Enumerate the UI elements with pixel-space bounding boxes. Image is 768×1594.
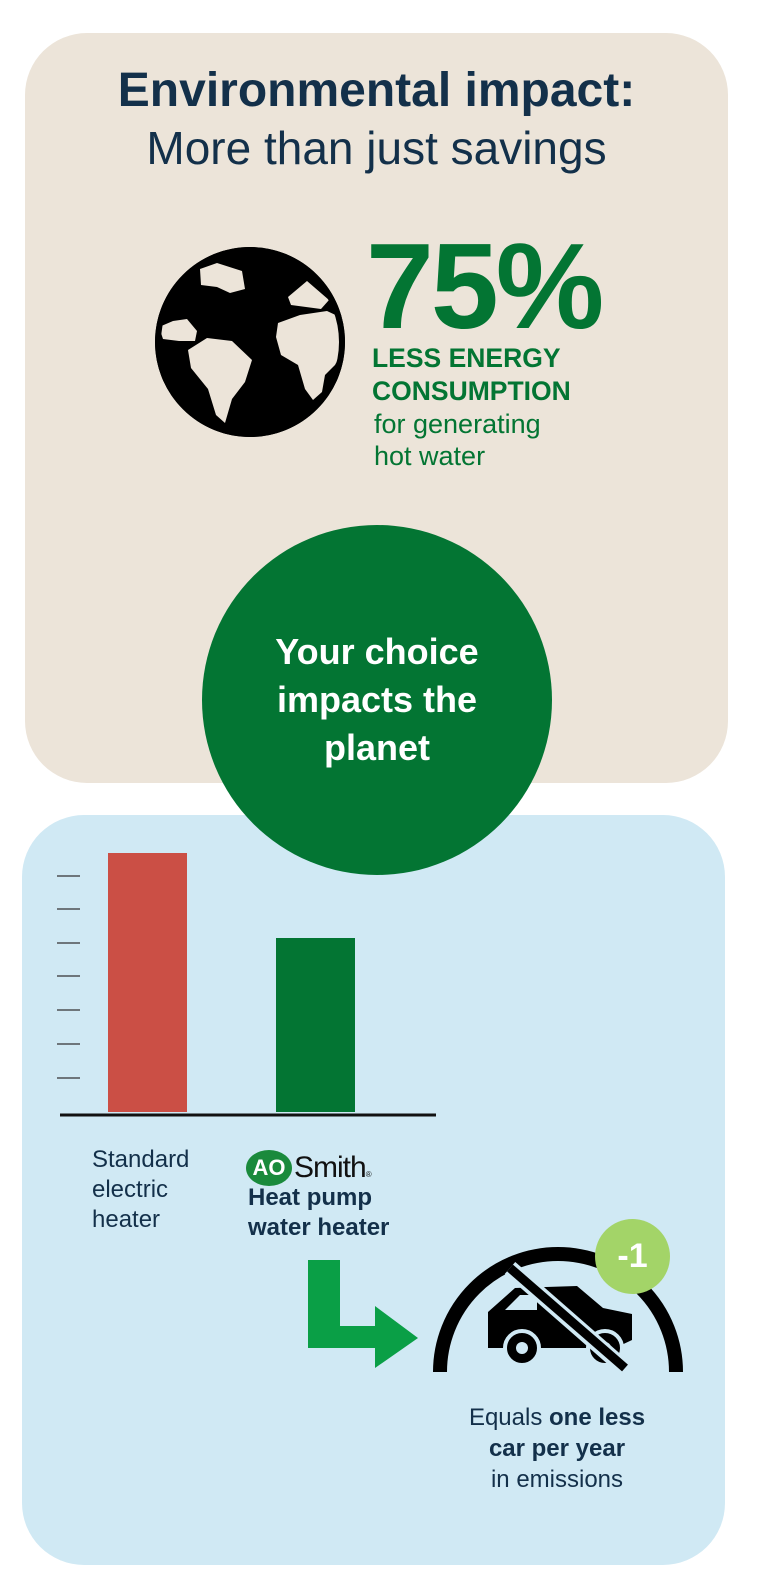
stat: 75%: CONSUMPTION (372, 376, 571, 406)
label: heat pump water heater: water heater (248, 1214, 389, 1241)
title: Environmental impact: (118, 64, 635, 117)
stat: 75%: 75% (366, 218, 601, 354)
callout: green circle: planet (324, 727, 430, 768)
label: heat pump water heater: Heat pump (248, 1184, 372, 1211)
bar chart (57, 853, 436, 1116)
logo: AO Smith: Smith® (294, 1151, 371, 1184)
stat: 75%: hot water (374, 441, 485, 471)
label: standard electric heater: heater (92, 1206, 160, 1233)
panel: top beige (25, 33, 728, 783)
logo: AO Smith (246, 1150, 372, 1186)
title (118, 64, 635, 174)
text: equals one less car: car per year (489, 1435, 625, 1462)
badge: -1: -1 (617, 1237, 648, 1275)
callout: green circle: impacts the (277, 679, 477, 720)
callout: green circle: Your choice (275, 631, 479, 672)
stat: 75% (366, 218, 601, 471)
label: standard electric heater: electric (92, 1176, 168, 1203)
callout: green circle (202, 525, 552, 875)
panel: bottom blue (22, 815, 725, 1565)
title: More than just savings (146, 122, 607, 174)
text: equals one less car: Equals one less (469, 1404, 645, 1431)
icon: no car (433, 1247, 683, 1372)
label: standard electric heater (92, 1146, 189, 1233)
icon: globe (155, 247, 345, 437)
text: equals one less car: in emissions (491, 1466, 623, 1493)
stat: 75%: LESS ENERGY (372, 343, 560, 373)
label: heat pump water heater (248, 1184, 389, 1241)
badge: -1 (595, 1219, 670, 1294)
arrow (308, 1260, 418, 1368)
label: standard electric heater: Standard (92, 1146, 189, 1173)
text: equals one less car (469, 1404, 645, 1493)
stat: 75%: for generating (374, 409, 541, 439)
logo: AO Smith: AO (252, 1155, 286, 1180)
